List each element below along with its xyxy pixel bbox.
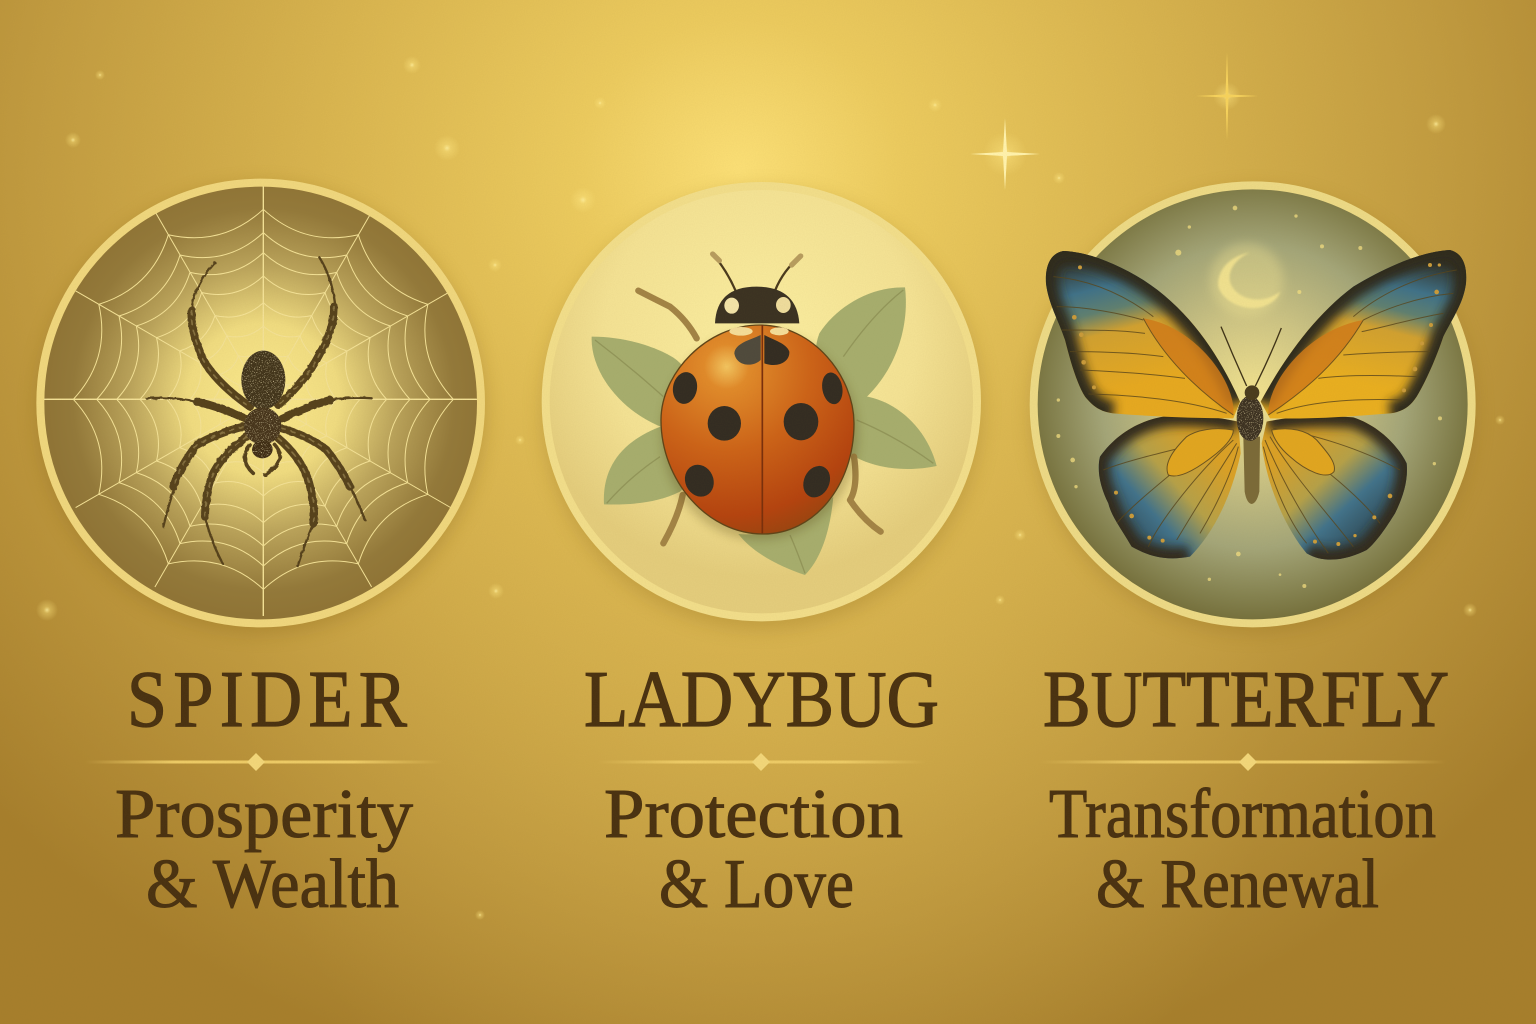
shell shadow: [662, 330, 858, 540]
night stars: [1056, 206, 1442, 588]
spider abdomen: [241, 351, 285, 409]
crescent moon: [1218, 253, 1280, 308]
right hindwing: [1262, 416, 1407, 560]
web: [43, 183, 480, 616]
ladybug legs: [638, 291, 881, 543]
medallion disc: [40, 183, 481, 623]
spider title: SPIDER: [127, 656, 407, 744]
butterfly meaning line 2: & Renewal: [1096, 846, 1379, 923]
butterfly head: [1245, 385, 1259, 400]
pronotum highlights: [729, 327, 789, 336]
ladybug artwork: [546, 186, 977, 617]
panel: spider: [37, 183, 485, 633]
panel: butterfly: [1031, 185, 1475, 633]
antenna tips: [713, 254, 801, 265]
label: spider: [85, 656, 443, 923]
spider medallion shadow: [37, 185, 485, 633]
left hindwing: [1099, 415, 1241, 558]
eye right: [776, 297, 791, 313]
ladybug head: [715, 287, 799, 323]
spider thorax: [244, 407, 281, 445]
medallion disc: [546, 186, 977, 617]
butterfly medallion shadow: [1031, 189, 1475, 633]
leaf veins: [595, 290, 933, 573]
ladybug title: LADYBUG: [584, 656, 939, 744]
moon glow: [1210, 243, 1283, 317]
sparkle star: right: [1196, 52, 1258, 140]
sparkle star: left: [970, 118, 1040, 190]
spider meaning line 2: & Wealth: [146, 846, 399, 923]
ladybug shell: [661, 325, 854, 534]
ladybug divider: [598, 753, 926, 771]
spider artwork: [40, 183, 481, 623]
left forewing: [1046, 251, 1240, 418]
label: butterfly: [1040, 656, 1449, 923]
butterfly abdomen: [1243, 437, 1260, 504]
butterfly thorax: [1237, 396, 1263, 441]
antennae: [713, 254, 801, 292]
medallion disc: [1034, 185, 1472, 623]
panel: ladybug: [542, 186, 982, 629]
ladybug spots: [670, 335, 845, 502]
wing margin dots: [1072, 263, 1441, 546]
butterfly antennae: [1221, 327, 1281, 386]
leaves: [592, 287, 937, 575]
spider divider: [85, 753, 443, 771]
butterfly title: BUTTERFLY: [1043, 656, 1449, 744]
butterfly divider: [1040, 753, 1446, 771]
ladybug medallion shadow: [542, 189, 982, 629]
butterfly artwork: [1034, 185, 1472, 623]
butterfly meaning line 1: Transformation: [1049, 776, 1436, 853]
label: ladybug: [584, 656, 939, 923]
spider head: [252, 440, 273, 458]
shell centre line: [760, 325, 765, 533]
spider meaning line 1: Prosperity: [115, 776, 413, 853]
eye left: [724, 298, 739, 314]
right forewing: [1261, 250, 1466, 419]
lower glow: [0, 440, 1536, 1024]
ladybug meaning line 2: & Love: [659, 846, 854, 923]
ladybug meaning line 1: Protection: [604, 776, 903, 853]
spider legs: [147, 257, 372, 566]
